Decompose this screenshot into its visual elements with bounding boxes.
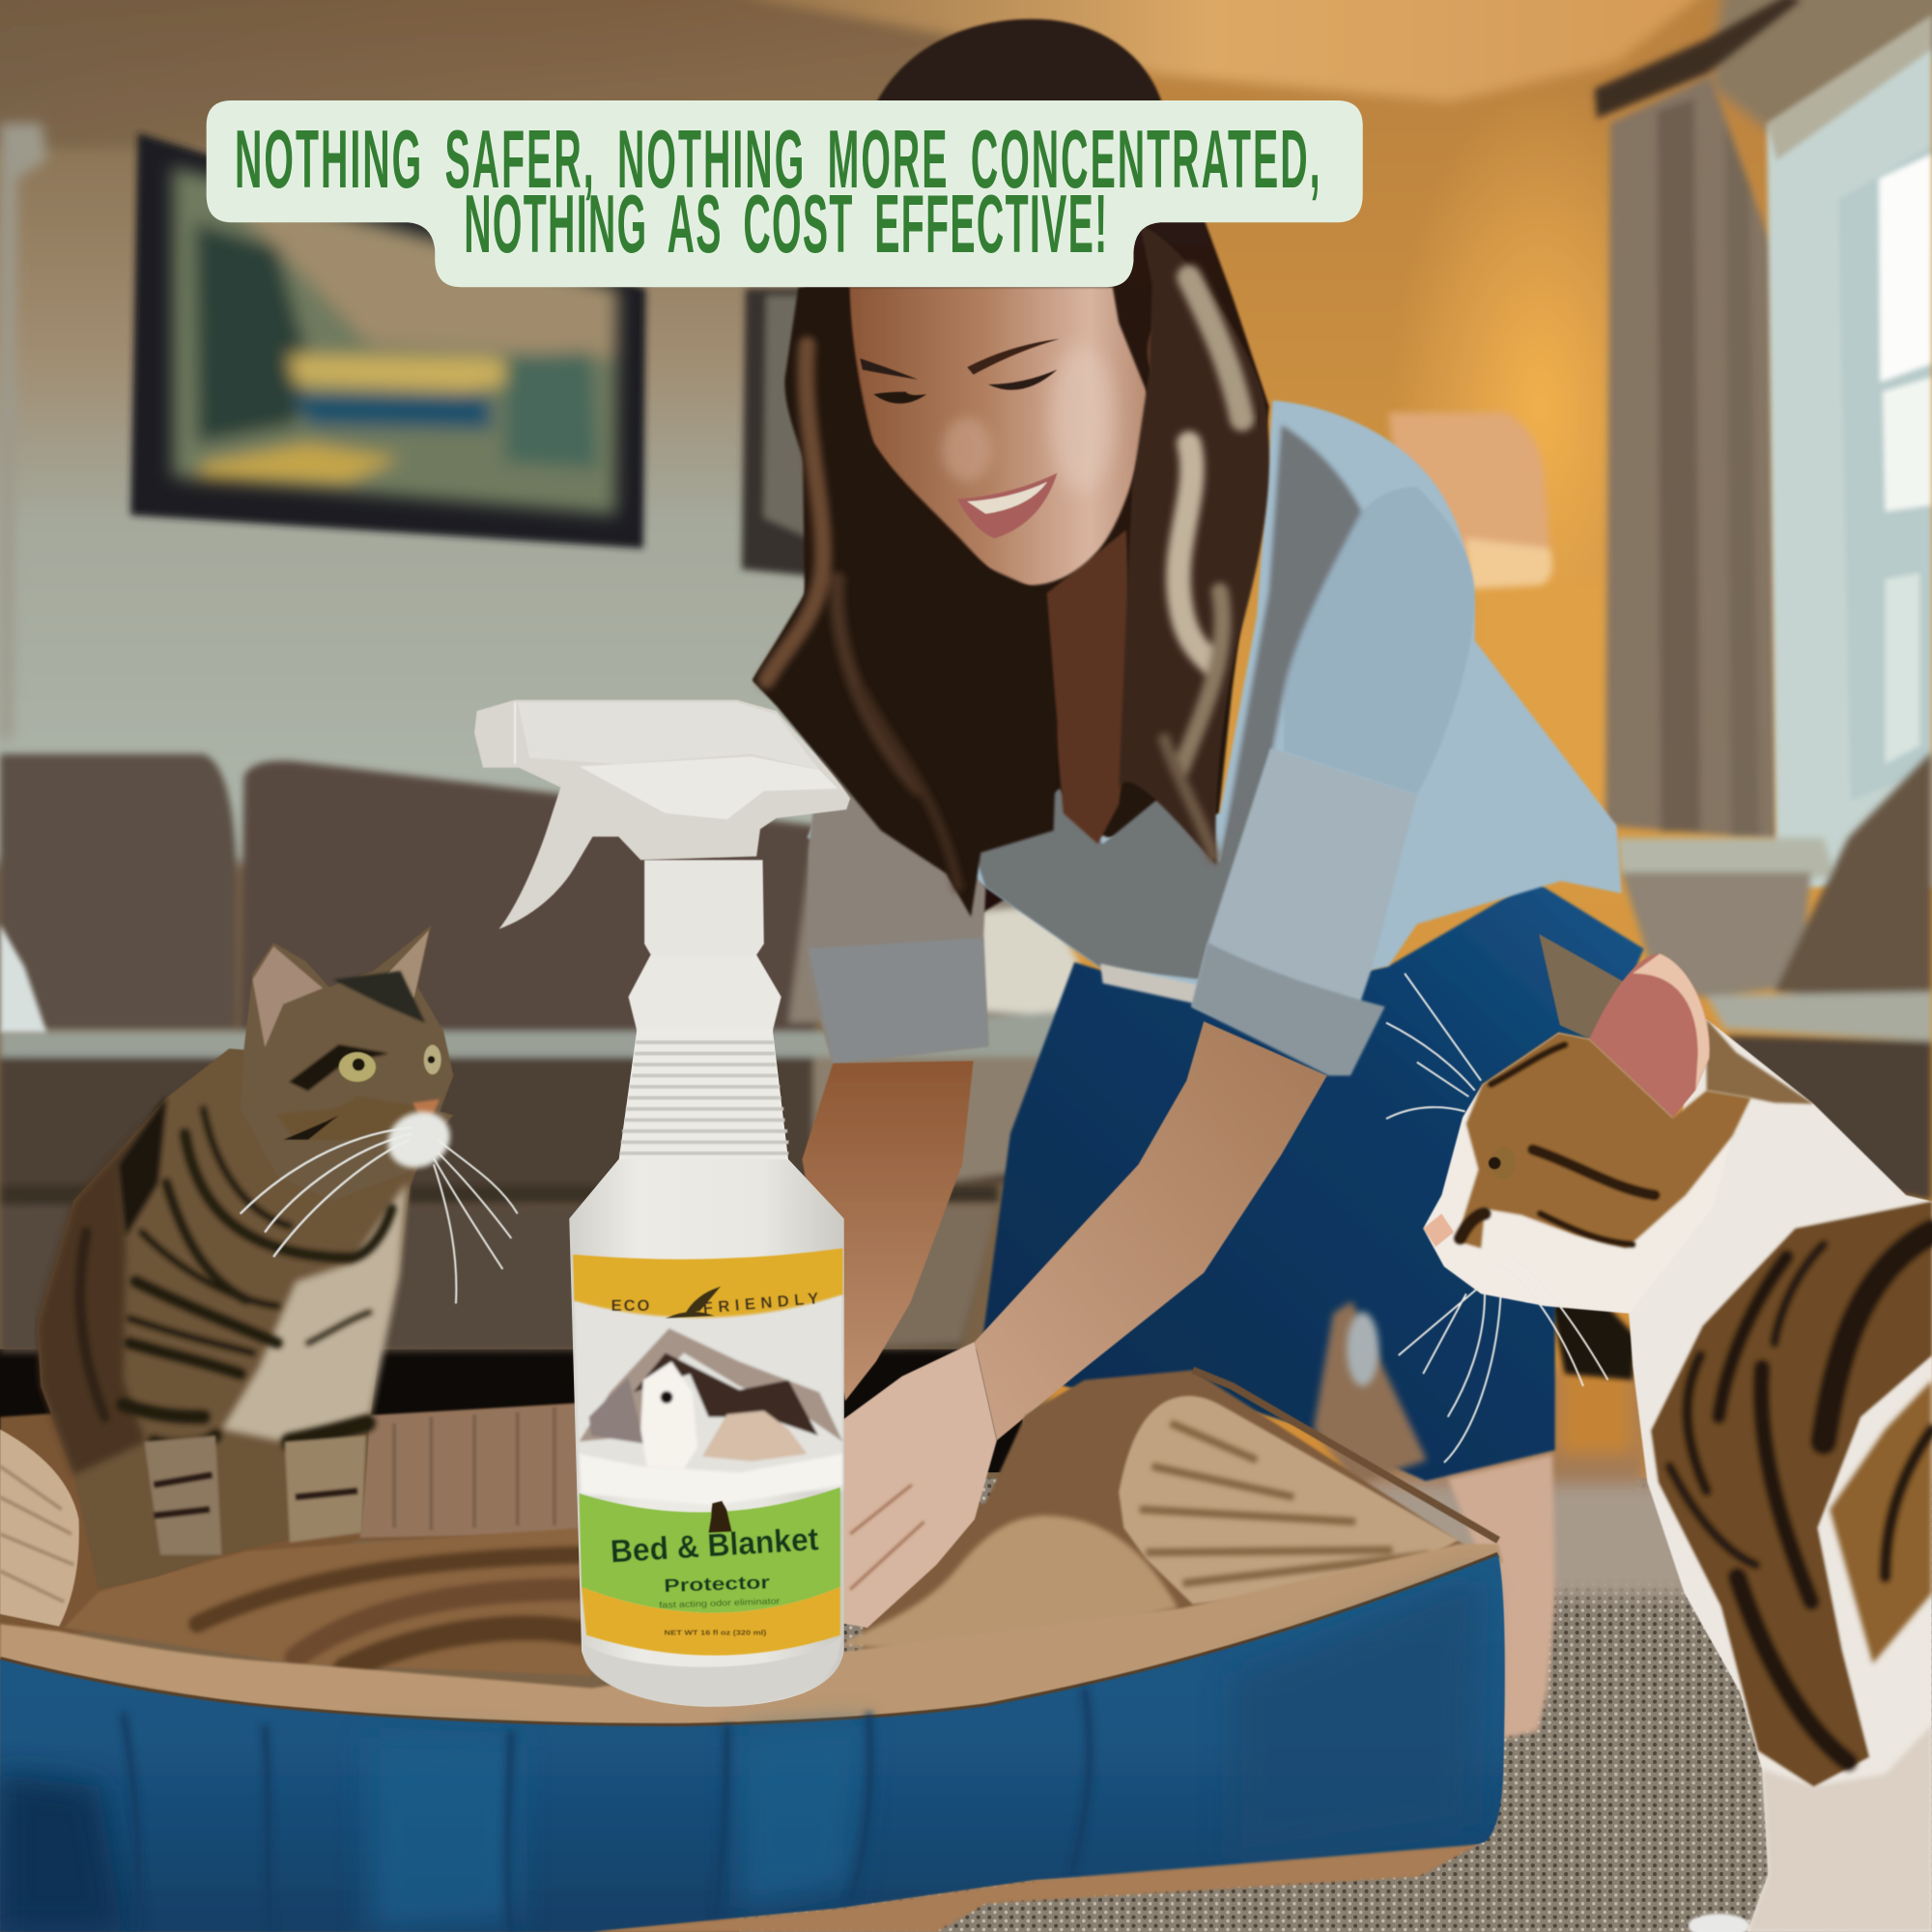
friendly text: FRIENDLY — [702, 1289, 819, 1318]
cat face stripes — [1460, 1045, 1655, 1244]
headline line 2: NOTHING AS COST EFFECTIVE! — [464, 179, 1107, 270]
cat nose — [412, 1099, 440, 1119]
blanket folds — [197, 1555, 579, 1669]
floor lamp — [1389, 412, 1552, 589]
bed rim — [0, 1544, 1503, 1729]
bed inner back wall right — [863, 1370, 1466, 1651]
ribbed neck — [618, 1029, 788, 1162]
right arm — [975, 1021, 1327, 1440]
trigger sprayer head — [474, 699, 850, 929]
pants — [980, 881, 1644, 1481]
gap between legs — [1314, 1301, 1427, 1485]
blurred object between legs — [1347, 1312, 1378, 1386]
smile — [957, 473, 1057, 538]
bottle base tone — [584, 1636, 841, 1707]
bed inner back wall left — [0, 1404, 591, 1638]
second picture frame — [742, 288, 819, 577]
cat body — [37, 1048, 425, 1589]
bed base — [591, 1844, 1479, 1932]
cat whiskers — [241, 1127, 518, 1303]
eco text: ECO — [611, 1296, 651, 1315]
bed edge piping — [1193, 1370, 1498, 1540]
bed folded stripes — [394, 1407, 554, 1530]
rim piping — [0, 1555, 1498, 1726]
cat front legs — [144, 1435, 222, 1555]
lower leg and foot — [1448, 1454, 1555, 1740]
left shoulder taupe — [807, 708, 988, 1064]
painting — [173, 166, 618, 515]
lower sleeve — [1191, 748, 1417, 1072]
leg stripes — [154, 1475, 357, 1516]
navy folds — [124, 1688, 1090, 1932]
cat nose — [1423, 1213, 1454, 1247]
navy shading — [0, 1577, 1479, 1932]
ear — [1148, 322, 1181, 381]
cat white body — [1629, 1019, 1932, 1932]
curtain — [1595, 0, 1802, 840]
cat tabby body — [1651, 1202, 1932, 1786]
walls — [0, 0, 1932, 1516]
cushion ribs — [1140, 1423, 1430, 1583]
face — [849, 287, 1150, 585]
blurred floor near knee — [1343, 1368, 1713, 1596]
window — [1767, 14, 1932, 887]
hair left front — [753, 287, 1057, 917]
tagline: fast acting odor eliminator — [659, 1596, 780, 1610]
net weight: NET WT 16 fl oz (320 ml) — [665, 1629, 767, 1637]
green band — [579, 1488, 840, 1613]
room background — [0, 0, 1932, 1516]
right pillow — [838, 1516, 1178, 1658]
woman — [753, 19, 1644, 1740]
cat head white — [1423, 1033, 1732, 1314]
ribbed right cushion — [1119, 1396, 1459, 1605]
left arm — [802, 1061, 974, 1401]
finger gaps — [850, 1485, 924, 1589]
bottle collar — [629, 955, 781, 1032]
label photo — [574, 1295, 842, 1506]
nose highlight — [943, 417, 992, 482]
dark floor behind bed — [0, 1350, 1023, 1472]
undershirt — [974, 616, 1282, 980]
left cat — [37, 925, 518, 1589]
bed navy front — [0, 1555, 1505, 1932]
cat eye — [1491, 1148, 1516, 1179]
hair right highlights — [1164, 277, 1242, 856]
cat back shadow — [37, 1103, 166, 1475]
column at left wall — [0, 124, 46, 739]
sweater sleeve — [1284, 487, 1475, 795]
cat chest — [222, 1182, 407, 1441]
tabby stripes — [1669, 1233, 1932, 1762]
headline line 1: NOTHING SAFER, NOTHING MORE CONCENTRATED, — [235, 114, 1321, 206]
sofa and floor — [0, 752, 1932, 1932]
hair left strands — [766, 345, 958, 887]
cat head fur — [1457, 1033, 1750, 1248]
hair back — [753, 19, 1269, 918]
cat front ear — [1589, 953, 1710, 1118]
left roll cushion — [0, 1430, 79, 1627]
bottle body — [569, 1159, 844, 1707]
dark pillow behind cat — [1551, 1300, 1636, 1380]
cheek highlight — [1050, 345, 1114, 493]
sweater shoulder shadow — [1220, 425, 1361, 863]
left sofa — [0, 754, 1078, 1353]
shirt hem — [1100, 963, 1202, 1005]
cat whiskers — [1386, 974, 1608, 1463]
yellow lower band — [582, 1587, 840, 1656]
picture frame — [130, 133, 645, 549]
cat back ear — [1539, 934, 1627, 1038]
spray bottle product — [474, 699, 850, 1707]
hair right — [1119, 224, 1269, 865]
bottle cap — [644, 860, 764, 958]
product name: Bed & Blanket — [610, 1521, 819, 1570]
paw badge — [708, 1501, 732, 1533]
leaf icon — [666, 1287, 721, 1319]
protector text: Protector — [664, 1573, 771, 1597]
banner shape — [207, 100, 1363, 287]
carpet — [739, 1479, 1932, 1932]
cat muzzle — [379, 1101, 460, 1178]
pet bed — [0, 1370, 1505, 1932]
cat nape — [1707, 1019, 1814, 1104]
white pillow on sofa — [0, 924, 46, 1033]
cuff — [1191, 943, 1385, 1076]
right sofa — [1616, 752, 1932, 1202]
cat paw — [1688, 1914, 1749, 1932]
left sleeve lower — [809, 938, 988, 1064]
left blanket — [64, 1528, 591, 1676]
yellow band — [573, 1248, 842, 1321]
cat stripes — [80, 1109, 392, 1446]
eyes and brows — [860, 339, 1060, 404]
headline banner — [207, 100, 1363, 287]
right cat — [1386, 934, 1932, 1932]
hand — [838, 1342, 997, 1628]
cat head — [241, 925, 453, 1202]
cat eyes — [339, 1045, 441, 1082]
neck and chest — [1046, 529, 1132, 844]
cat lower legs — [1747, 1725, 1932, 1932]
sweater torso — [807, 401, 1622, 1005]
product label — [573, 1248, 842, 1656]
